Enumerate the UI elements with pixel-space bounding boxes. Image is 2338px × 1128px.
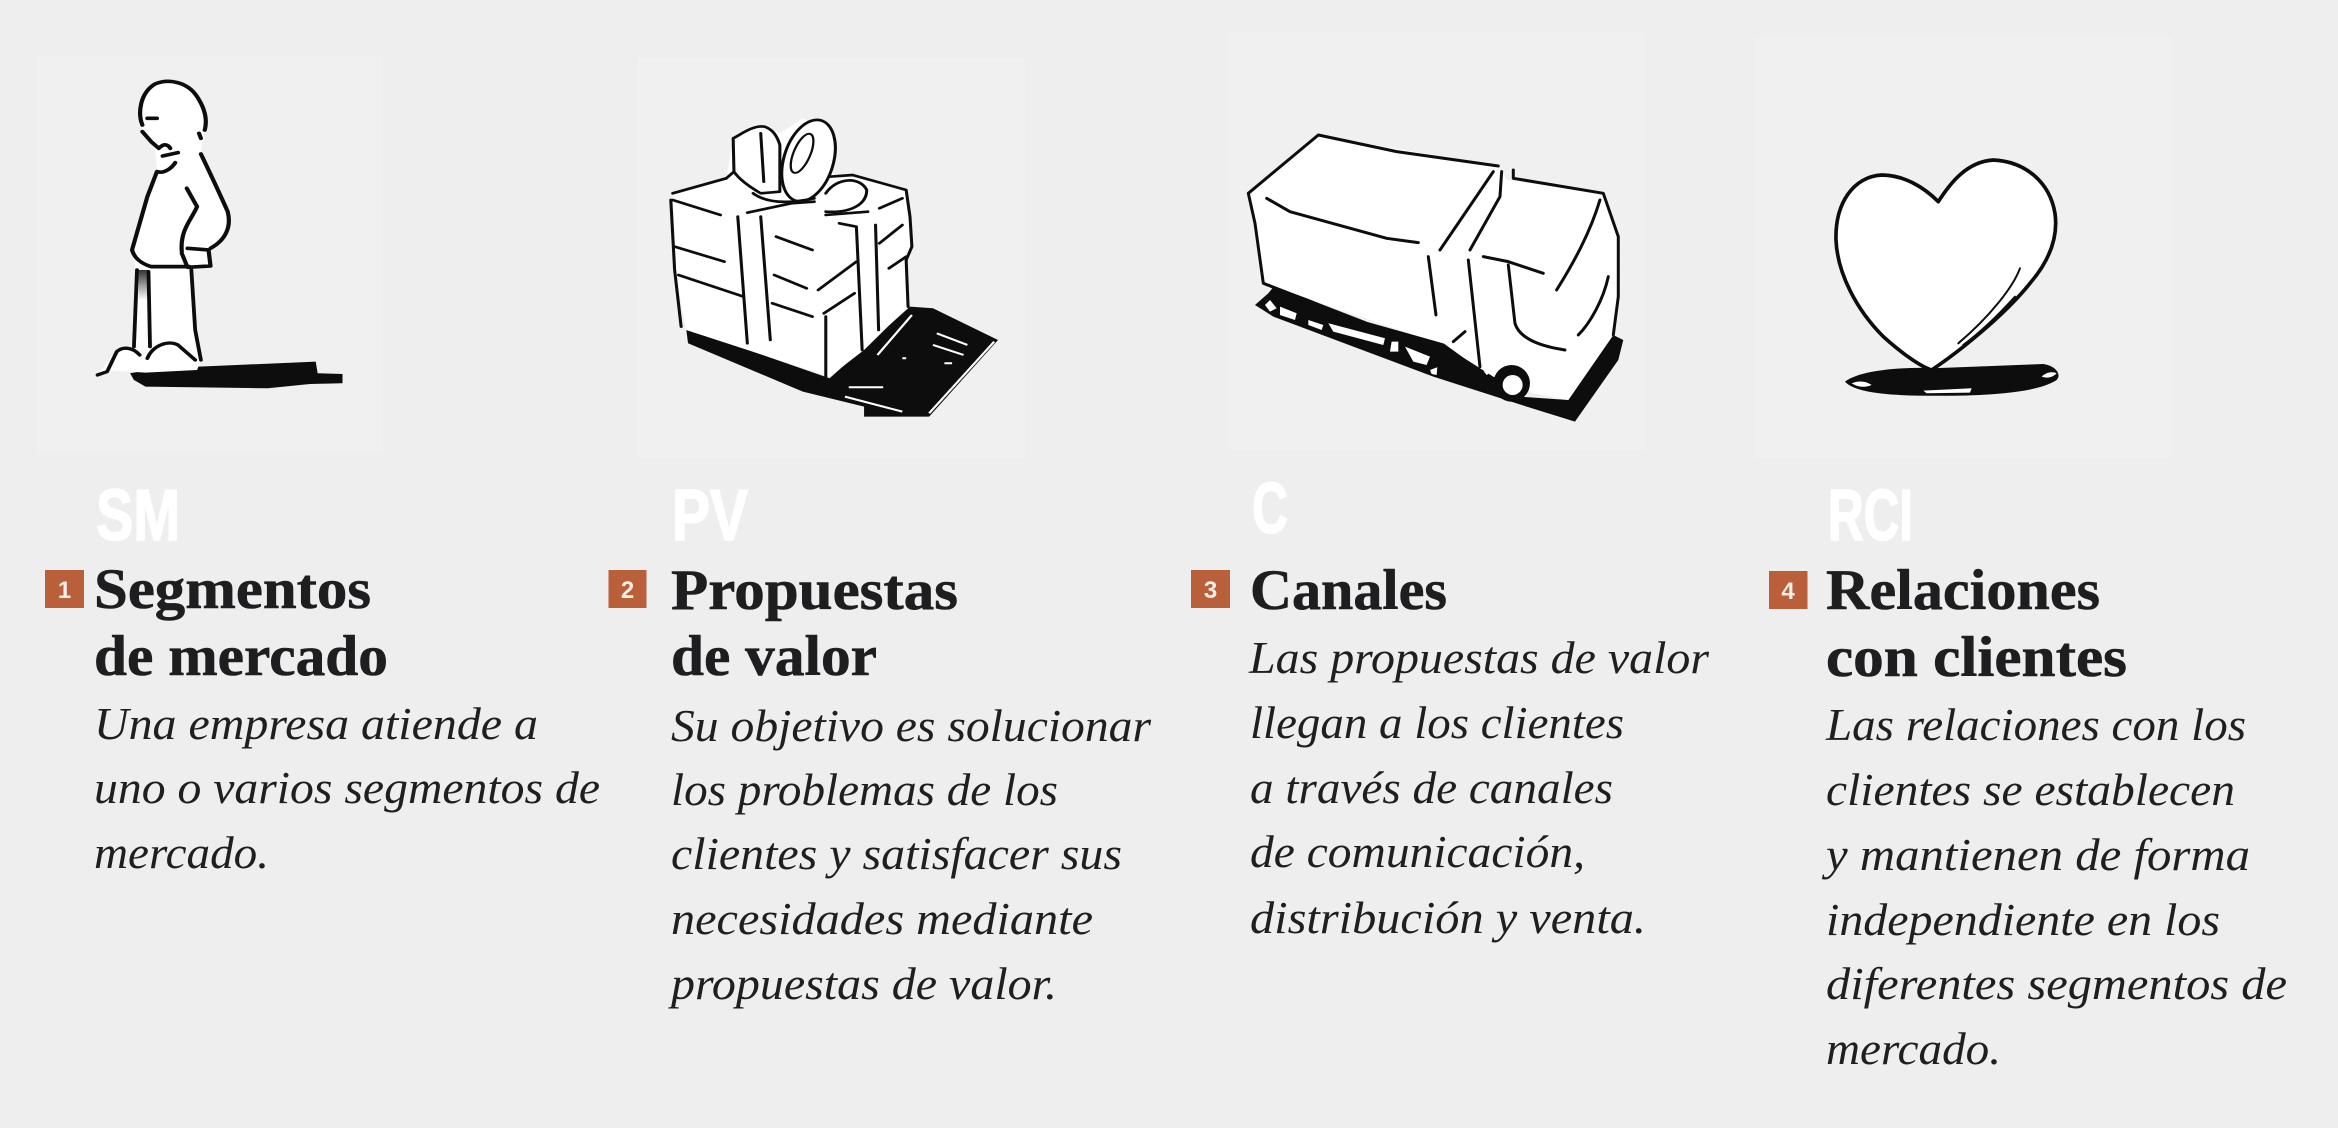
body text column 3: distribución y venta. <box>1250 892 1646 943</box>
abbreviation C: C <box>1252 469 1288 549</box>
heading: Canales: Canales <box>1250 559 1447 622</box>
badge 2 <box>608 570 646 608</box>
badge 2: 2 <box>621 577 634 604</box>
heading: Segmentos de mercado: Segmentos <box>94 558 371 621</box>
abbreviation RCI: RCI <box>1828 476 1913 556</box>
icon: standing person <box>98 81 343 388</box>
heading: Propuestas de valor: de valor <box>671 625 877 688</box>
heading: Relaciones con clientes: con clientes <box>1826 626 2127 689</box>
panel: propuestas de valor <box>638 58 1025 458</box>
body text column 4: y mantienen de forma <box>1822 829 2250 880</box>
panel: segmentos de mercado <box>38 55 383 453</box>
body text column 3: llegan a los clientes <box>1250 697 1624 748</box>
panel: canales <box>1228 33 1645 450</box>
heading: Propuestas de valor <box>671 559 958 688</box>
heading: Segmentos de mercado <box>94 558 388 688</box>
badge 4: 4 <box>1781 578 1795 605</box>
body text column 2: necesidades mediante <box>671 893 1093 944</box>
body text column 4: Las relaciones con los <box>1825 699 2246 750</box>
body text column 4 <box>1822 699 2287 1074</box>
column 4 text <box>1769 476 2287 1074</box>
column 2 text <box>608 476 1152 1009</box>
badge 3 <box>1191 570 1230 608</box>
body text column 2 <box>668 700 1152 1009</box>
body text column 3: Las propuestas de valor <box>1248 632 1710 683</box>
abbreviation PV: PV <box>672 476 748 556</box>
badge 1: 1 <box>58 577 71 604</box>
panel: relaciones con clientes <box>1755 37 2172 458</box>
body text column 3 <box>1248 632 1710 943</box>
body text column 4: diferentes segmentos de <box>1826 958 2287 1009</box>
heading: Propuestas de valor: Propuestas <box>671 559 958 622</box>
column 3 text <box>1191 469 1710 943</box>
body text column 4: clientes se establecen <box>1826 764 2235 815</box>
abbreviation SM: SM <box>96 476 180 556</box>
body text column 1: uno o varios segmentos de <box>94 762 600 813</box>
icon: gift box <box>671 115 998 417</box>
body text column 2: clientes y satisfacer sus <box>671 828 1122 879</box>
column 1 text <box>45 476 600 878</box>
body text column 4: mercado. <box>1826 1023 2001 1074</box>
body text column 1: Una empresa atiende a <box>94 698 538 749</box>
body text column 3: a través de canales <box>1250 762 1613 813</box>
icon: heart <box>1836 160 2059 396</box>
heading: Relaciones con clientes: Relaciones <box>1826 559 2100 622</box>
badge 3: 3 <box>1204 577 1217 604</box>
icon: delivery truck <box>1248 135 1623 422</box>
body text column 2: Su objetivo es solucionar <box>671 700 1152 751</box>
heading: Segmentos de mercado: de mercado <box>94 625 388 688</box>
body text column 4: independiente en los <box>1826 894 2220 945</box>
body text column 2: los problemas de los <box>671 764 1058 815</box>
body text column 3: de comunicación, <box>1250 826 1585 877</box>
body text column 1 <box>94 698 600 878</box>
heading: Relaciones con clientes <box>1826 559 2127 689</box>
body text column 2: propuestas de valor. <box>668 958 1057 1009</box>
body text column 1: mercado. <box>94 827 269 878</box>
badge 1 <box>45 570 84 608</box>
badge 4 <box>1769 571 1808 609</box>
